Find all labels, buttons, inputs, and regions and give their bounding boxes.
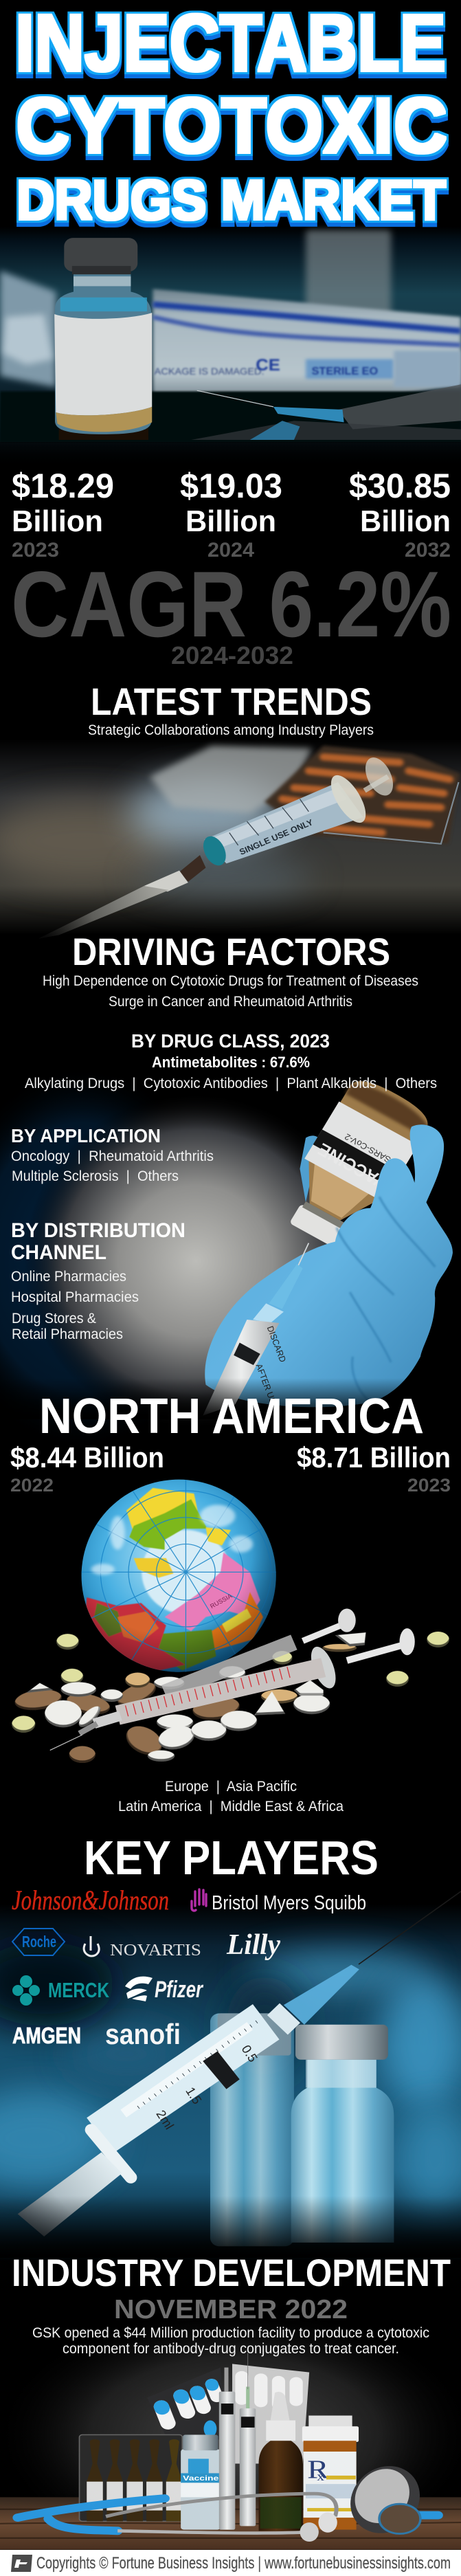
icon: ampoules [80,2435,182,2521]
panel: by distribution channel: BY DISTRIBUTION [11,1219,185,1242]
image: globe with pills and syringes [12,1460,449,1763]
panel: by distribution channel: Hospital Pharmacies [11,1289,139,1305]
driver 1: High Dependence on Cytotoxic Drugs for Treatment of Diseases [43,973,418,989]
icon: syringe [38,753,398,939]
icon: prescription bottle [302,2416,359,2530]
stat: 2023 market size: Billion [12,504,103,538]
stat: 2024 market size: $19.03 [180,467,282,505]
development text: component for antibody-drug conjugates to treat cancer. [63,2341,399,2357]
logo: Lilly: Lilly [226,1929,280,1961]
icon: syringe: SINGLE USE ONLY [238,817,315,857]
panel: by application: BY APPLICATION [11,1125,161,1146]
stat: 2032 market size [349,467,451,562]
icon: Fortune Business Insights logo [11,2555,32,2572]
logo: Johnson & Johnson: Johnson&Johnson [12,1885,169,1916]
icon: capsule blister [147,2368,226,2440]
image: vial and syringe packs: ACKAGE IS DAMAGED. [155,366,265,377]
stat: north america 2022: 2022 [10,1475,54,1496]
CAGR period: 2024-2032 [171,641,293,669]
panel: by application: Multiple Sclerosis | Others [12,1168,179,1184]
stat: 2032 market size: Billion [360,504,451,538]
logo: Sanofi: sanofi [105,2018,181,2050]
icon: stethoscope [18,2458,438,2542]
stat: north america 2022: $8.44 Billion [10,1441,164,1474]
image: gloved hand with vial: VACCINE [315,1139,391,1192]
stat: 2023 market size: 2023 [12,539,59,562]
stat: 2032 market size: 2032 [405,539,451,562]
heading: driving factors: DRIVING FACTORS [72,930,390,973]
icon: vaccine vial: Vaccine [183,2475,218,2483]
heading: by drug class: BY DRUG CLASS, 2023 [131,1030,330,1052]
panel: by application [11,1125,214,1184]
stat: north america 2022 [10,1441,164,1496]
image: medical supplies on wooden table [0,2305,461,2564]
logo: Amgen: AMGEN [12,2023,81,2048]
image: vial and syringe packs [0,227,461,469]
panel: by distribution channel: CHANNEL [11,1241,106,1264]
logo: Roche: Roche [22,1933,56,1951]
icon: vial [54,238,152,440]
image: gloved hand with vial [0,1065,461,1450]
heading: north america: NORTH AMERICA [39,1389,424,1444]
other regions: Europe | Asia Pacific [165,1779,297,1795]
icon: syringe [18,1891,461,2236]
logo: Bristol Myers Squibb: Bristol Myers Squibb [212,1892,366,1914]
icon: syringe: 2ml [153,2107,177,2132]
icon: syringes [50,1608,415,1751]
stat: 2024 market size [180,467,282,562]
icon: dropper bottle [259,2392,303,2531]
icon: syringe: 1.5 [183,2085,205,2107]
panel: by distribution channel [11,1219,185,1342]
panel: by application: Oncology | Rheumatoid Arthritis [11,1148,214,1164]
icon: prescription bottle: R [307,2455,329,2484]
icon: globe: RUSSIA [209,1592,234,1610]
image: vial and syringe packs: CE [256,355,280,375]
image: gloved hand with vial: AFTER USE [254,1363,280,1410]
image: gloved hand with vial: SARS-CoV-2 [343,1132,392,1164]
other regions [118,1779,344,1814]
icon: vials [210,2013,394,2246]
icon: pills [12,1632,449,1763]
stat: north america 2023: 2023 [407,1475,451,1496]
logo: Novartis [84,1936,201,1959]
image: syringe and blue vials [0,1891,461,2261]
panel: by distribution channel: Drug Stores & [12,1311,96,1326]
logo: Pfizer: Pfizer [155,1977,203,2003]
logo: Pfizer [125,1977,203,2003]
image: vial and syringe packs: STERILE EO [312,366,378,377]
other regions: Latin America | Middle East & Africa [118,1799,344,1814]
stat: north america 2023: $8.71 Billion [297,1441,451,1474]
stat: 2032 market size: $30.85 [349,467,451,505]
icon: syringe: 0.5 [238,2043,260,2065]
trend text: Strategic Collaborations among Industry Players [88,722,374,738]
heading: latest trends: LATEST TRENDS [91,680,372,723]
logo: Merck: MERCK [48,1978,109,2002]
heading: key players: KEY PLAYERS [84,1831,379,1885]
icon: white blister [232,2364,309,2463]
stat: 2023 market size [12,467,114,562]
logo: Merck [12,1975,109,2006]
leading drug class: Antimetabolites : 67.6% [152,1054,310,1071]
driver 2: Surge in Cancer and Rheumatoid Arthritis [109,994,352,1010]
panel: by distribution channel: Online Pharmacies [11,1269,126,1285]
title: CYTOTOXIC [16,82,447,170]
development text [32,2325,429,2357]
stat: 2024 market size: 2024 [207,539,254,562]
icon: syringes [219,2353,256,2530]
icon: vaccine vial [181,2435,221,2530]
footer [0,2550,461,2576]
stat: north america 2023 [297,1441,451,1496]
logo: Bristol Myers Squibb [192,1889,366,1914]
stat: 2024 market size: Billion [185,504,276,538]
title [15,0,447,232]
panel: by distribution channel: Retail Pharmacies [12,1326,123,1342]
development date: NOVEMBER 2022 [114,2295,348,2324]
image: syringe on blister pack [0,739,461,939]
icon: globe [81,1479,276,1672]
stat: 2023 market size: $18.29 [12,467,114,505]
icon: prescription bottle: x [317,2471,324,2483]
development text: GSK opened a $44 Million production facility to produce a cytotoxic [32,2325,429,2341]
image: gloved hand with vial: DISCARD [265,1324,288,1364]
other drug classes: Alkylating Drugs | Cytotoxic Antibodies | Plant Alkaloids | Others [25,1076,437,1091]
logo: Roche [12,1929,65,1955]
logo: Novartis: NOVARTIS [110,1942,201,1959]
